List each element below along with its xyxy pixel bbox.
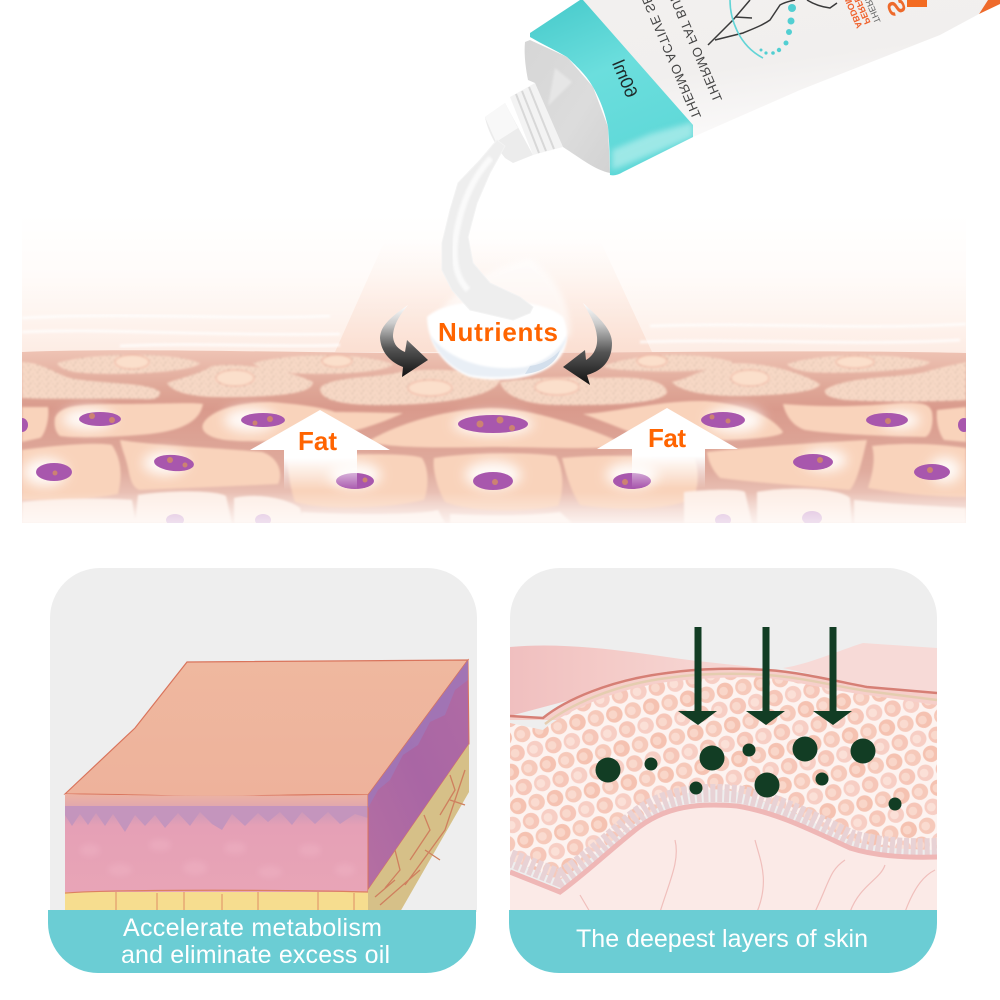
tube of cream xyxy=(485,0,1000,175)
faint surface streaks xyxy=(22,316,966,346)
caption band left xyxy=(48,910,476,973)
orange block xyxy=(907,0,927,7)
tube shoulder xyxy=(525,40,610,173)
fat cells row 3 xyxy=(22,440,966,511)
upper cell nuclei outlines xyxy=(115,355,874,396)
label: fat left: Fat xyxy=(298,426,337,456)
faint dome xyxy=(430,258,570,337)
upper granular cells xyxy=(22,355,966,405)
caption text left: Accelerate metabolism xyxy=(123,914,382,942)
cell layers xyxy=(22,355,966,523)
veins xyxy=(580,840,935,912)
dermis xyxy=(510,805,937,912)
blob xyxy=(427,300,567,380)
curved arrow right xyxy=(563,303,612,385)
fat cells row 2 xyxy=(22,401,966,448)
fat layer side xyxy=(368,744,469,912)
mirrored tube text xyxy=(608,0,911,121)
faded cells row 4 xyxy=(22,489,966,523)
dermis mottling xyxy=(80,839,355,878)
particles xyxy=(596,736,902,810)
curved arrow left xyxy=(380,305,428,377)
illustration: skin layers xyxy=(510,643,937,912)
light cone behind nutrients xyxy=(335,276,652,352)
basal cell band xyxy=(510,793,937,878)
top face xyxy=(65,660,468,796)
teal band xyxy=(530,0,693,175)
surface line xyxy=(510,669,937,718)
panel: metabolism xyxy=(48,568,477,973)
caption text right: The deepest layers of skin xyxy=(576,925,868,953)
blob shadow right xyxy=(525,350,560,374)
caption band right xyxy=(509,910,937,973)
shoulder highlight xyxy=(548,68,572,106)
stream xyxy=(442,140,533,320)
caption text left: and eliminate excess oil xyxy=(121,941,390,969)
arrows down xyxy=(678,627,852,725)
epidermis ridges xyxy=(65,806,368,832)
arrow: fat right xyxy=(597,408,738,488)
white cell glows xyxy=(23,407,961,489)
caption text left xyxy=(121,914,390,969)
cell layer xyxy=(510,677,937,880)
side ridges xyxy=(368,660,468,808)
orange stripe xyxy=(979,0,1000,14)
back sheets xyxy=(510,645,760,716)
panel: deepest layers xyxy=(509,568,937,973)
cell membrane base xyxy=(22,350,966,523)
fat layer front xyxy=(65,890,368,912)
label: fat right: Fat xyxy=(648,423,686,453)
nozzle xyxy=(485,83,563,163)
side face xyxy=(368,660,469,890)
arrow: fat left xyxy=(250,410,390,490)
mirrored tube text: 60ml xyxy=(608,57,642,101)
body sketch xyxy=(708,0,837,45)
surface outer layer xyxy=(510,669,937,720)
illustration: skin block xyxy=(65,660,469,912)
tube body xyxy=(583,0,988,137)
cell nuclei xyxy=(16,412,970,526)
bottom fade xyxy=(22,498,966,523)
panel: skin cross-section xyxy=(22,257,966,523)
stream highlight xyxy=(455,158,491,290)
label: nutrients: Nutrients xyxy=(438,317,558,347)
front face xyxy=(65,794,368,892)
blob outline shading xyxy=(430,335,567,377)
teal curve and dots xyxy=(730,0,796,58)
cream stream and blob xyxy=(427,140,570,380)
teal pale stripe xyxy=(612,122,693,170)
basement membrane xyxy=(510,805,937,892)
